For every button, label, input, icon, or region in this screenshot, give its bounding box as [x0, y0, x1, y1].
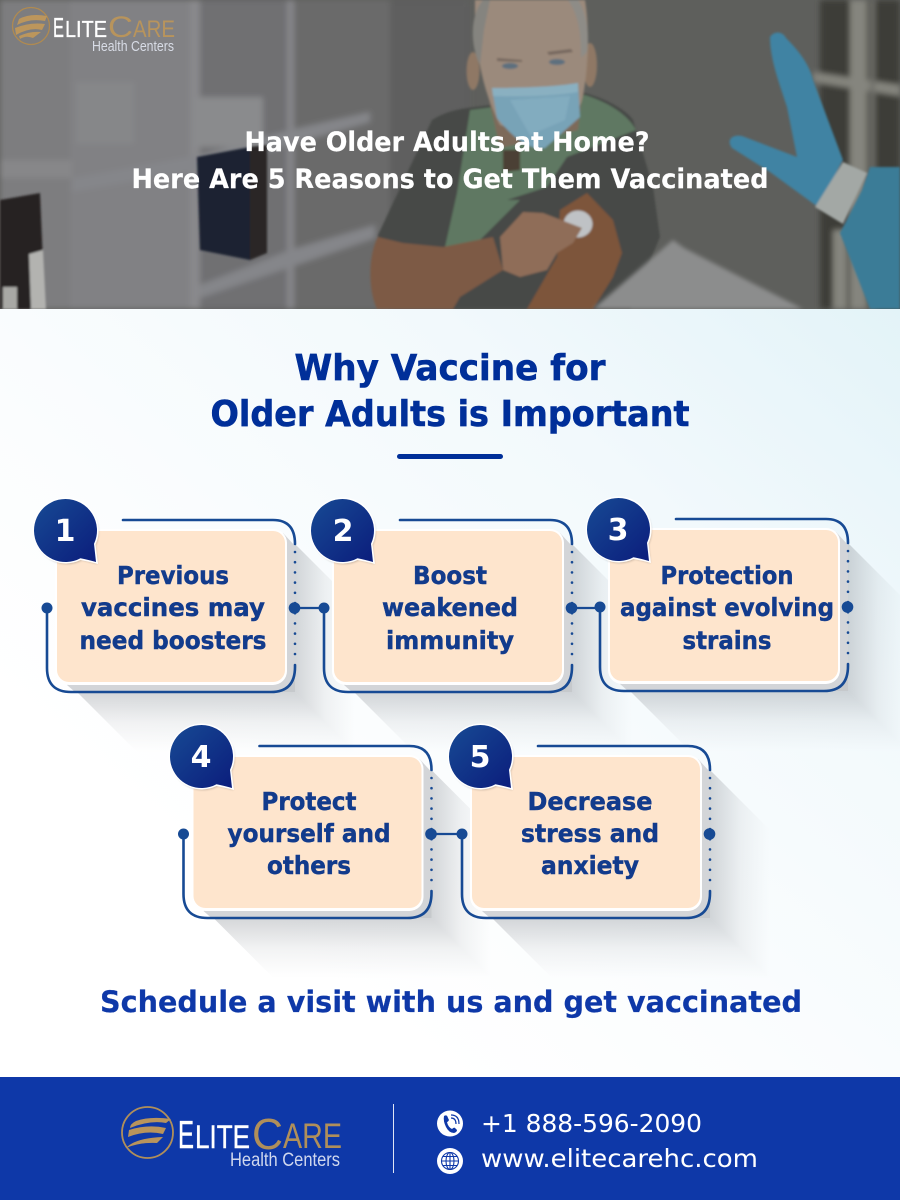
- card 5 text: [521, 787, 659, 880]
- footer logo: LITE: [195, 1119, 250, 1155]
- footer logo: Health Centers: [230, 1150, 340, 1171]
- eyes: [502, 63, 518, 69]
- binders: [0, 145, 267, 309]
- badge 2: 2: [333, 514, 353, 549]
- paper: [593, 240, 803, 309]
- hand: [500, 212, 582, 277]
- header logo: C: [108, 11, 133, 44]
- card 4: [169, 723, 492, 978]
- header title: Have Older Adults at Home?: [244, 127, 650, 158]
- header title: [132, 127, 768, 195]
- card 2 text: immunity: [386, 626, 514, 655]
- card 3 text: Protection: [660, 561, 794, 590]
- window: [820, 0, 900, 309]
- header logo: Health Centers: [92, 38, 174, 55]
- card 5: [448, 723, 770, 978]
- header logo: LITE: [65, 16, 107, 42]
- card 5 text: Decrease: [528, 787, 652, 816]
- badge 3: [586, 496, 652, 563]
- card 3 text: strains: [682, 626, 772, 655]
- card 1: [33, 497, 355, 752]
- footer logo: E: [178, 1114, 194, 1157]
- card 1 text: vaccines may: [81, 593, 265, 622]
- card 1 text: need boosters: [80, 626, 266, 655]
- header title: Here Are 5 Reasons to Get Them Vaccinated: [132, 164, 768, 195]
- badge 2: [310, 497, 376, 564]
- heading underline: [397, 454, 503, 459]
- header logo: ARE: [133, 16, 175, 43]
- badge 5: 5: [470, 740, 490, 775]
- connector 2-3: [572, 607, 600, 609]
- badge 4: [169, 723, 235, 790]
- connector 4-5: [432, 833, 462, 835]
- card 2 text: [382, 561, 518, 655]
- call to action: Schedule a visit with us and get vaccinated: [100, 985, 802, 1019]
- card 4 text: [228, 787, 390, 880]
- badge 1: 1: [55, 514, 75, 549]
- section heading: Why Vaccine for: [294, 348, 606, 389]
- section heading: [210, 348, 690, 435]
- icon: phone: [437, 1110, 463, 1136]
- card 2: [310, 497, 632, 752]
- header logo: E: [53, 12, 64, 43]
- card 3: [586, 496, 900, 751]
- mask: [492, 83, 580, 148]
- footer band: [0, 1077, 900, 1200]
- card 4 text: others: [267, 851, 351, 880]
- badge 1: [33, 497, 99, 564]
- phone number: +1 888-596-2090: [481, 1109, 702, 1138]
- header logo: [12, 8, 175, 55]
- badge 4: 4: [191, 740, 211, 775]
- card 3 text: [620, 561, 834, 655]
- badge 5: [448, 723, 514, 790]
- connector 1-2: [296, 607, 324, 609]
- head: [475, 0, 588, 128]
- icon: globe: [437, 1148, 463, 1174]
- footer logo: C: [252, 1110, 283, 1159]
- card 4 text: yourself and: [228, 819, 390, 848]
- footer divider: [393, 1104, 394, 1173]
- forearm: [370, 237, 503, 309]
- shirt: [378, 93, 660, 309]
- bandage: [564, 210, 592, 238]
- shelves: [0, 0, 390, 309]
- footer logo: ARE: [283, 1117, 342, 1156]
- footer logo: [122, 1107, 342, 1171]
- man: [370, 0, 660, 309]
- card 1 text: [80, 561, 266, 655]
- section heading: Older Adults is Important: [210, 394, 690, 435]
- upper arm: [527, 193, 622, 309]
- sweater: [445, 95, 636, 247]
- gloved hand: [730, 33, 900, 309]
- card 5 text: stress and: [521, 819, 659, 848]
- card 1 text: Previous: [117, 561, 229, 590]
- brows: [497, 49, 573, 62]
- card 5 text: anxiety: [541, 851, 639, 880]
- card 3 text: against evolving: [620, 593, 834, 622]
- page background: [0, 309, 900, 1077]
- badge 3: 3: [608, 513, 628, 548]
- header photo: senior man receiving vaccine: [0, 0, 900, 309]
- neck: [490, 104, 581, 148]
- card 2 text: Boost: [413, 561, 487, 590]
- card 4 text: Protect: [262, 787, 357, 816]
- card 2 text: weakened: [382, 593, 518, 622]
- ears: [466, 52, 480, 90]
- website: www.elitecarehc.com: [481, 1144, 758, 1173]
